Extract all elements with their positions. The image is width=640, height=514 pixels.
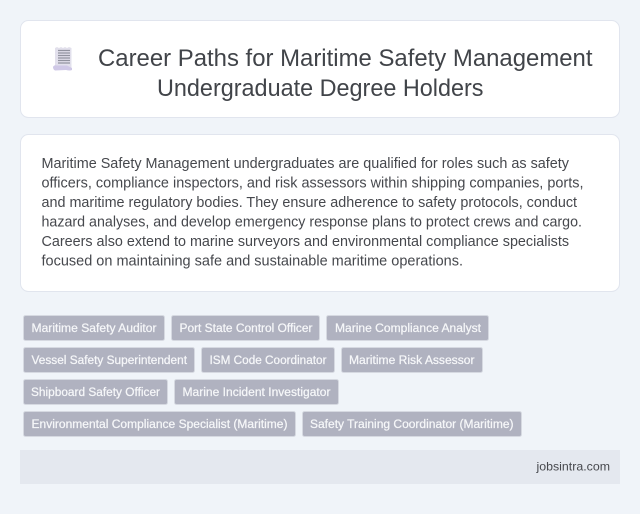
tag: Vessel Safety Superintendent — [24, 348, 194, 372]
tag: Marine Incident Investigator — [174, 380, 338, 404]
tag: Port State Control Officer — [172, 316, 320, 340]
tag: Marine Compliance Analyst — [326, 316, 488, 340]
tag: Maritime Safety Auditor: Maritime Safety Auditor — [32, 321, 156, 335]
tag: ISM Code Coordinator: ISM Code Coordinator — [210, 353, 326, 367]
heading: Undergraduate Degree Holders — [157, 75, 484, 102]
icon: document scroll — [53, 47, 72, 70]
heading — [98, 45, 593, 102]
panel: description text: Careers also extend to marine surveyors and environmental compliance specialists — [42, 234, 569, 250]
tag list: job titles — [24, 316, 522, 436]
heading: Career Paths for Maritime Safety Management — [98, 45, 593, 72]
tag: Maritime Risk Assessor: Maritime Risk Assessor — [349, 353, 474, 367]
tag: Marine Incident Investigator: Marine Incident Investigator — [182, 385, 330, 399]
tag: Marine Compliance Analyst: Marine Compliance Analyst — [335, 321, 482, 335]
panel: title header — [20, 20, 620, 118]
tag: ISM Code Coordinator — [202, 348, 334, 372]
tag: Maritime Safety Auditor — [24, 316, 164, 340]
footer bar: jobsintra.com — [535, 460, 610, 474]
tag: Port State Control Officer: Port State Control Officer — [180, 321, 312, 335]
footer bar — [20, 450, 620, 484]
tag: Vessel Safety Superintendent: Vessel Safety Superintendent — [32, 353, 188, 367]
tag: Shipboard Safety Officer — [24, 380, 168, 404]
panel: description text: focused on maintaining safe and sustainable maritime operations. — [42, 254, 463, 270]
panel: description text: and maritime regulatory bodies. They ensure adherence to safety protocols, conduct — [42, 195, 577, 211]
panel: description text — [20, 134, 620, 292]
panel: description text: hazard analyses, and develop emergency response plans to protect crews and cargo. — [42, 214, 582, 230]
tag: Shipboard Safety Officer: Shipboard Safety Officer — [31, 385, 160, 399]
panel: description text: Maritime Safety Management undergraduates are qualified for roles such as safety — [42, 156, 570, 172]
tag: Environmental Compliance Specialist (Maritime): Environmental Compliance Specialist (Maritime) — [32, 417, 288, 431]
panel: description text: officers, compliance inspectors, and risk assessors within shipping companies, ports, — [42, 176, 584, 192]
tag: Safety Training Coordinator (Maritime): Safety Training Coordinator (Maritime) — [310, 417, 514, 431]
tag: Safety Training Coordinator (Maritime) — [302, 412, 522, 436]
tag: Environmental Compliance Specialist (Maritime) — [24, 412, 296, 436]
tag: Maritime Risk Assessor — [342, 348, 482, 372]
